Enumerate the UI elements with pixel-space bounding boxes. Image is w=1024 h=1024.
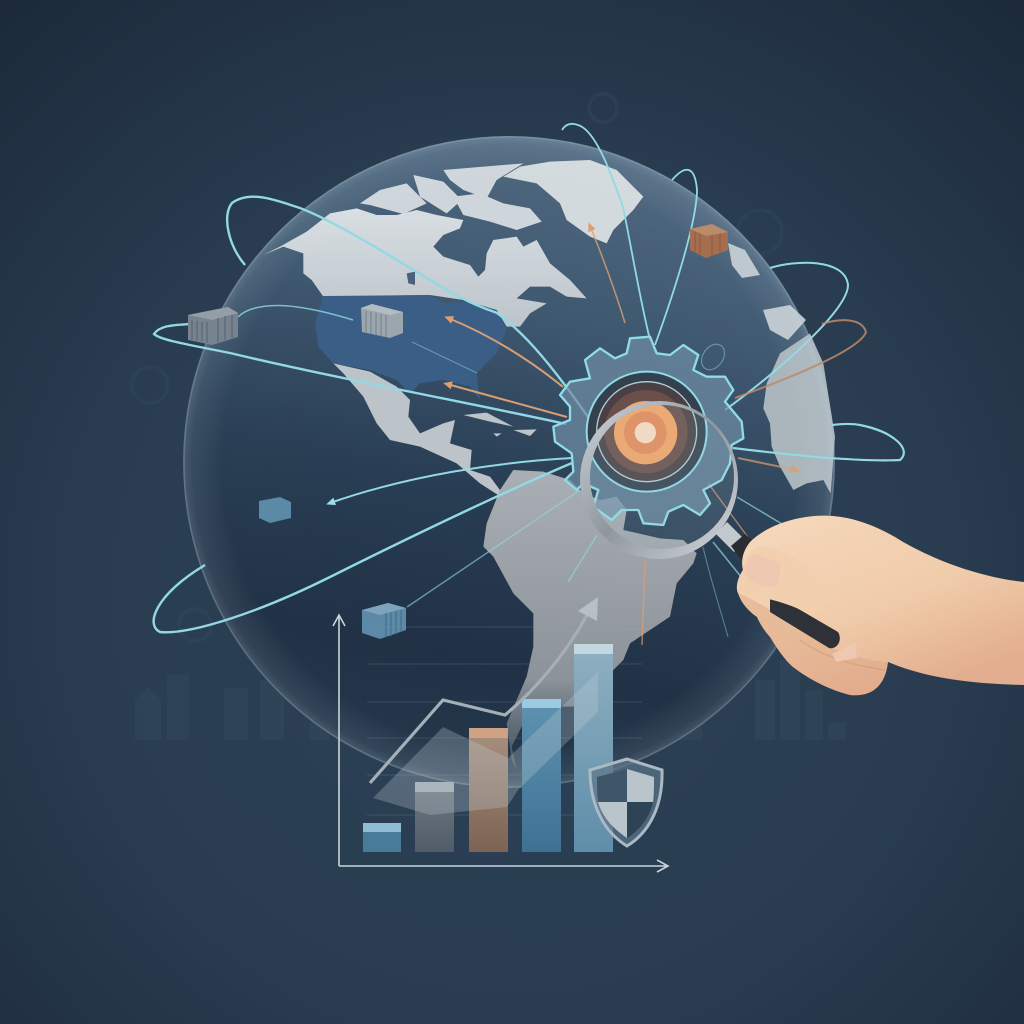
background faint icons [132,94,782,641]
gear core [587,372,707,492]
orange route arrows [447,226,866,645]
container: ocean [259,497,291,523]
magnifier handle end [770,592,840,648]
region: highlighted USA [315,295,507,400]
bar 4 [522,699,561,852]
fingernail [745,555,780,587]
continent: Mexico and Central America [333,363,508,502]
continent: Africa [763,333,835,493]
magnifier grip [731,534,770,574]
continent: Europe fragments [728,243,806,340]
globe [183,136,835,788]
globe rim [183,136,835,788]
map group: South America [483,470,697,770]
hand [737,516,1024,695]
chart axes [333,615,668,872]
continent: Greenland [503,160,643,243]
bar chart [333,597,668,872]
hand shadow [738,593,888,695]
orbit lines [154,124,904,637]
magnifier neck [716,522,745,552]
index finger [738,546,835,616]
bar 3 [469,728,508,852]
gear [553,337,743,525]
continent: Canada [247,208,587,327]
trend area [373,672,598,815]
trend arrow [370,615,587,783]
chart gridlines [367,627,642,815]
container: USA [361,304,403,338]
cargo containers [188,224,728,639]
lake [407,272,415,285]
background faint bar chart [135,645,846,740]
magnifying glass [580,401,770,574]
shield icon [590,759,662,846]
bar 2 [415,782,454,852]
finger crease [800,640,885,670]
bar 1 [363,823,401,852]
container: left [188,307,238,345]
caribbean islands [463,413,537,437]
magnifier lens [590,405,734,549]
bar 5 [574,644,613,852]
map group: North America [247,160,643,502]
container: orange [690,224,728,258]
magnifier ring [580,401,738,559]
arctic islands [360,163,542,230]
lower fingernail [832,643,857,662]
container: lower [362,603,406,639]
